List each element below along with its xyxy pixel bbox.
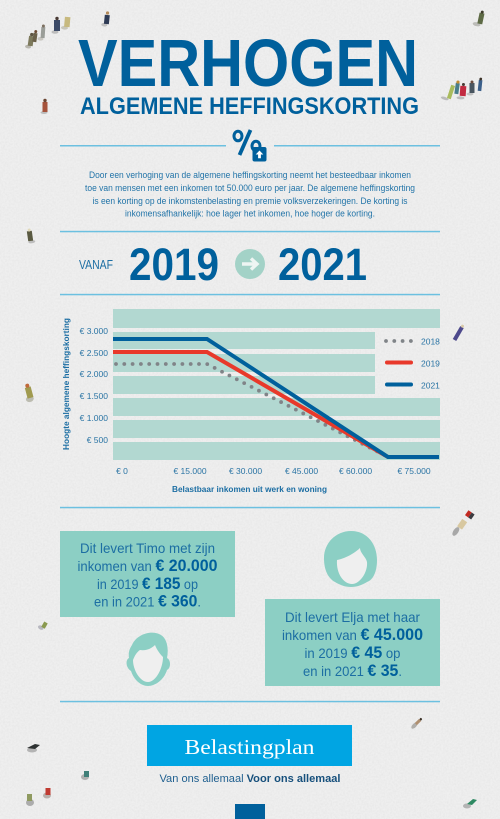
x axis labels: € 30.000 — [229, 466, 262, 476]
x axis title: Belastbaar inkomen uit werk en woning — [172, 484, 327, 494]
x axis labels: € 45.000 — [285, 466, 318, 476]
icon: percent with up arrow — [234, 130, 266, 162]
panel: Elja: inkomen van € 45.000 — [282, 625, 423, 644]
panel: Elja — [265, 599, 440, 686]
heading: vanaf 2019 to 2021 — [79, 239, 367, 290]
intro text: inkomensafhankelijk: hoe lager het inkomen, hoe hoger de korting. — [125, 208, 375, 220]
y axis labels: € 1.500 — [80, 391, 108, 401]
intro text: Door een verhoging van de algemene heffingskorting neemt het besteedbaar inkomen — [89, 170, 411, 181]
intro text: toe van mensen met een inkomen tot 50.000 euro per jaar. De algemene heffingskorting — [85, 183, 415, 194]
chart lines — [113, 339, 439, 457]
chart bands — [113, 309, 440, 460]
line chart — [61, 309, 440, 494]
logo: Belastingplan: Belastingplan — [184, 735, 315, 759]
y axis labels: € 500 — [87, 435, 108, 445]
y axis title: Hoogte algemene heffingskorting — [61, 318, 71, 450]
x axis labels: € 0 — [116, 466, 128, 476]
tagline: Van ons allemaal Voor ons allemaal — [160, 773, 340, 785]
title: VERHOGEN — [78, 26, 418, 101]
title: ALGEMENE HEFFINGSKORTING — [80, 93, 419, 120]
heading: vanaf 2019 to 2021: VANAF — [79, 258, 113, 272]
panel: Timo — [60, 531, 235, 617]
legend — [386, 336, 440, 390]
panel: Timo: in 2019 € 185 op — [97, 574, 198, 593]
x axis labels — [116, 466, 431, 476]
panel: Timo: inkomen van € 20.000 — [78, 556, 218, 575]
intro text: is een korting op de inkomstenbelasting en premie volksverzekeringen. De korting is — [92, 196, 408, 207]
footer tab — [235, 804, 265, 819]
panel: Timo: en in 2021 € 360. — [94, 592, 201, 610]
legend: 2019 — [421, 358, 440, 368]
x axis labels: € 75.000 — [397, 466, 431, 476]
legend: 2021 — [421, 380, 440, 390]
y axis labels: € 2.500 — [80, 348, 108, 358]
y axis labels — [80, 326, 108, 445]
icon: arrow — [235, 249, 265, 279]
legend: 2018 — [421, 336, 440, 346]
icon: woman — [324, 531, 377, 587]
panel: Elja: Dit levert Elja met haar — [285, 609, 420, 625]
y axis labels: € 1.000 — [80, 413, 108, 423]
y axis labels: € 3.000 — [80, 326, 108, 336]
intro text — [85, 170, 415, 220]
x axis labels: € 15.000 — [173, 466, 207, 476]
heading: vanaf 2019 to 2021: 2019 — [129, 239, 219, 290]
x axis labels: € 60.000 — [339, 466, 372, 476]
y axis labels: € 2.000 — [80, 369, 108, 379]
icon: man — [127, 633, 170, 686]
panel: Elja: in 2019 € 45 op — [304, 643, 401, 662]
panel: Timo: Dit levert Timo met zijn — [80, 540, 215, 556]
logo: Belastingplan — [147, 725, 352, 766]
heading: vanaf 2019 to 2021: 2021 — [278, 239, 367, 290]
panel: Elja: en in 2021 € 35. — [303, 661, 402, 680]
